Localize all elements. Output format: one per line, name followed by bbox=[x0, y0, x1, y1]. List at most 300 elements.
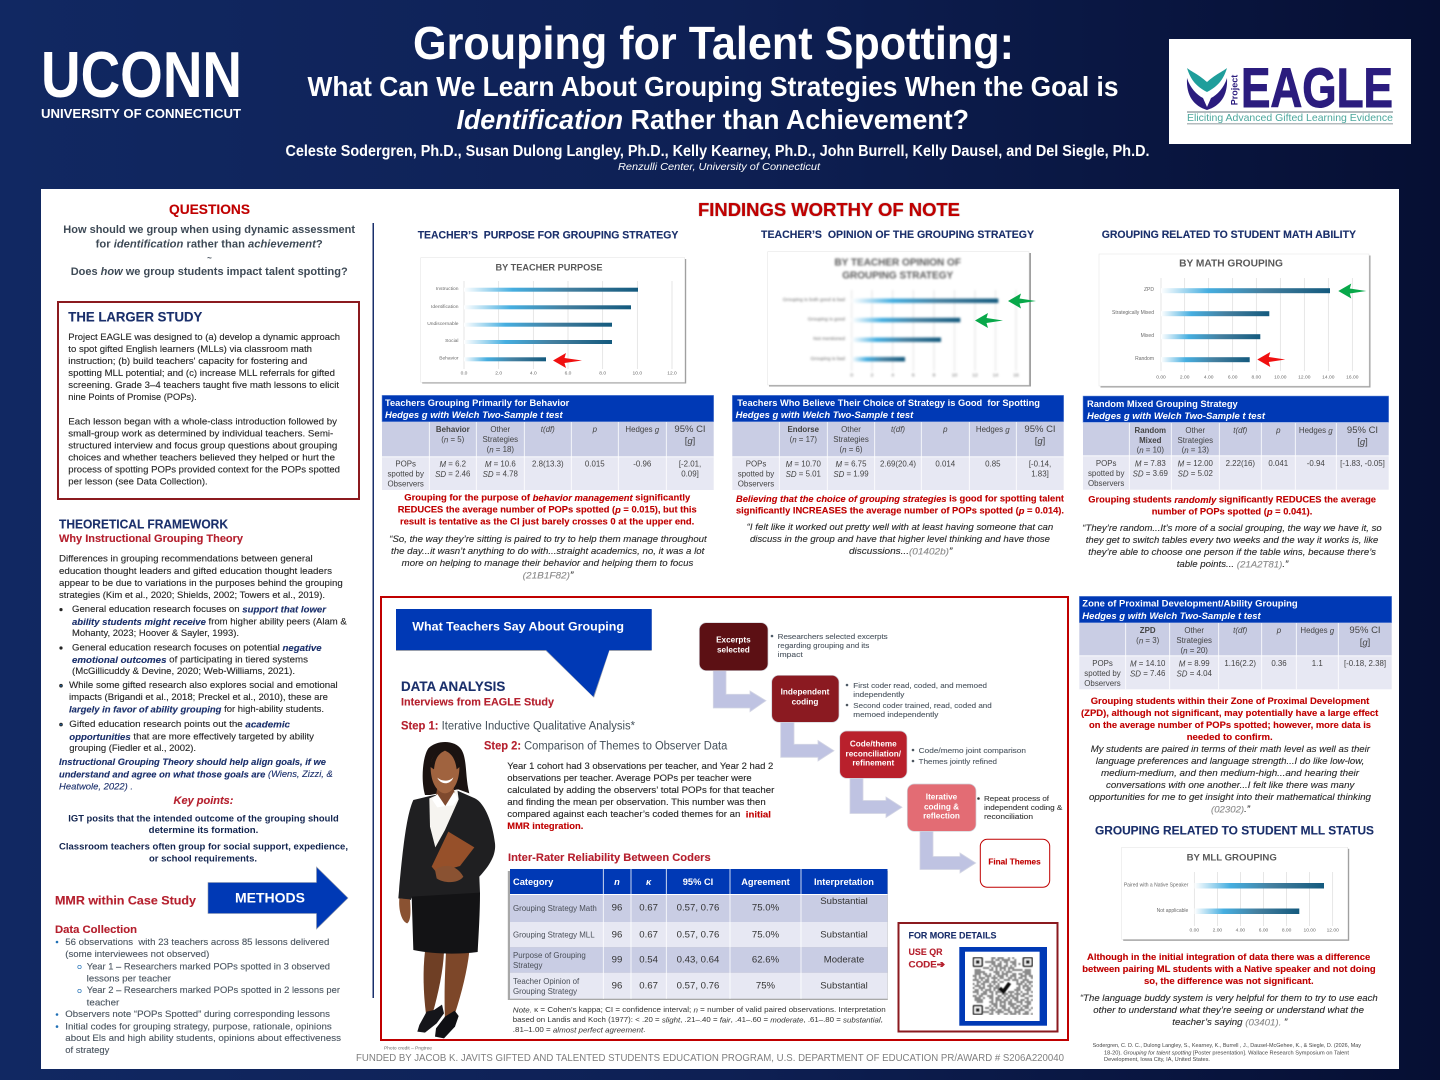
table: random mixed grouping: 95% CI bbox=[1347, 425, 1378, 436]
text block: theoretical framework body: Heatwole, 2022) . bbox=[59, 781, 133, 792]
logo: Project EAGLE: Project bbox=[1230, 75, 1240, 105]
table: zone of proximal development: Other bbox=[1184, 626, 1204, 635]
step: independent coding: coding bbox=[792, 698, 818, 706]
title: Identification Rather than Achievement? bbox=[456, 104, 969, 135]
logo: UConn: UNIVERSITY OF CONNECTICUT bbox=[41, 106, 241, 121]
text block: larger study body: process of spotting POPs provided context for the POPs spotted bbox=[68, 464, 340, 476]
chart: by teacher purpose: 0.0 bbox=[461, 370, 468, 376]
table: teachers grouping for behavior: spotted by bbox=[387, 470, 424, 478]
table: inter-rater reliability: 75% bbox=[756, 980, 776, 992]
quote: random: they get to switch tables every two weeks and the way it works is, like bbox=[1086, 535, 1378, 546]
quote: MLL: “The language buddy system is very helpful for them to try to use each bbox=[1080, 993, 1378, 1004]
table: zone of proximal development: POPs bbox=[1092, 659, 1113, 668]
chart: by teacher opinion: Not mentioned bbox=[813, 336, 845, 342]
table: inter-rater reliability: Substantial bbox=[820, 896, 868, 907]
step: excerpts selected bbox=[699, 623, 768, 671]
table: zone of proximal development: Observers bbox=[1084, 679, 1121, 688]
notes: reconciliation: Themes jointly refined bbox=[919, 757, 997, 766]
step: code/theme reconciliation: reconciliation/ bbox=[846, 750, 902, 758]
table: teachers who believe strategy is good: Observers bbox=[738, 480, 774, 488]
chart: by teacher purpose: Behavior bbox=[439, 356, 459, 362]
table note: based on Landis and Koch (1977): < .20 = slight, .21–.40 = fair, .41–.60 = moderate , .61–.80 = substantial , bbox=[513, 1015, 883, 1024]
table: teachers grouping for behavior: 0.015 bbox=[585, 460, 605, 468]
chart: by teacher purpose: Instruction bbox=[436, 286, 459, 292]
table: inter-rater reliability: 95% CI bbox=[683, 877, 713, 887]
table: teachers who believe strategy is good: 0.014 bbox=[935, 460, 956, 468]
table: random mixed grouping: Other bbox=[1185, 426, 1206, 435]
arrow: coding to reconciliation bbox=[781, 722, 834, 761]
text block: step 2 description: MMR integration. bbox=[507, 821, 583, 832]
table: inter-rater reliability: 0.57, 0.76 bbox=[677, 902, 719, 914]
table: teachers who believe strategy is good: [g] bbox=[1035, 436, 1045, 446]
text block: data collection: 56 observations with 23 teachers across 85 lessons delivered bbox=[65, 937, 329, 948]
table: random mixed grouping: (n = 13) bbox=[1182, 446, 1209, 454]
table: teachers grouping for behavior: SD = 4.78 bbox=[483, 470, 519, 478]
table: random mixed grouping: Mixed bbox=[1139, 436, 1162, 445]
table: teachers who believe strategy is good: (n = 17) bbox=[790, 435, 817, 444]
table: zone of proximal development: 0.36 bbox=[1271, 659, 1287, 668]
table: inter-rater reliability: 75.0% bbox=[752, 902, 780, 914]
step: excerpts selected: selected bbox=[717, 646, 750, 654]
chart: by math grouping: Strategically Mixed bbox=[1112, 310, 1154, 316]
arrow: excerpts to coding bbox=[713, 671, 766, 712]
table: zone of proximal development: ZPD bbox=[1140, 626, 1156, 635]
text block: data collection: lessons per teacher bbox=[87, 974, 172, 984]
table: zone of proximal development: Zone of Proximal Development/Ability Grouping bbox=[1082, 599, 1298, 609]
text block: theoretical framework body: grouping (Fiedler et al., 2002). bbox=[69, 743, 196, 754]
photo: teacher with folder bbox=[398, 742, 495, 1038]
arrow: red bbox=[553, 353, 582, 368]
text block: theoretical framework body: Differences in grouping recommendations between general bbox=[59, 554, 313, 564]
table: inter-rater reliability: Agreement bbox=[741, 877, 790, 887]
table: teachers grouping for behavior bbox=[382, 395, 714, 490]
citation: Development, Iowa City, IA, United States. bbox=[1104, 1057, 1210, 1063]
chart: by math grouping: 10.00 bbox=[1274, 374, 1287, 380]
quote: zone of proximal development: conversations with one another...I felt like there was many bbox=[1106, 780, 1356, 791]
table: random mixed grouping: spotted by bbox=[1088, 469, 1124, 478]
table: zone of proximal development: M = 14.10 bbox=[1130, 659, 1166, 668]
text block: larger study body: Each lesson began with a whole-class introduction followed by bbox=[68, 416, 337, 428]
notes: excerpts: regarding grouping and its bbox=[778, 641, 870, 650]
heading: math ability: GROUPING RELATED TO STUDENT MATH ABILITY bbox=[1102, 229, 1357, 241]
table: zone of proximal development: M = 8.99 bbox=[1179, 659, 1210, 668]
quote: zone of proximal development: (02302).” bbox=[1211, 804, 1251, 815]
table: inter-rater reliability: 99 bbox=[612, 954, 622, 966]
text block: larger study body: per lesson (see Data Collection). bbox=[68, 476, 208, 488]
table: random mixed grouping: SD = 5.02 bbox=[1178, 469, 1213, 478]
callout: what teachers say: What Teachers Say About Grouping bbox=[412, 620, 624, 634]
flow diagram: analysis process bbox=[699, 623, 1062, 887]
notes: iterative coding: Repeat process of bbox=[984, 794, 1050, 803]
table: teachers who believe strategy is good bbox=[732, 395, 1064, 490]
table: zone of proximal development: t(df) bbox=[1233, 626, 1248, 635]
table: inter-rater reliability: n bbox=[614, 877, 620, 887]
heading: data analysis: Interviews from EAGLE Study bbox=[401, 696, 555, 708]
quote: random: “They’re random...It’s more of a social grouping, the way we have it, so bbox=[1082, 523, 1382, 534]
arrow: green second bbox=[975, 313, 1003, 328]
table: zone of proximal development: Hedges g bbox=[1300, 626, 1335, 635]
table: inter-rater reliability: Purpose of Grouping bbox=[513, 951, 586, 960]
finding: random grouping: Grouping students randomly significantly REDUCES the average bbox=[1088, 494, 1376, 506]
arrow: green ZPD bbox=[1338, 284, 1366, 298]
text block: data collection: Year 1 – Researchers marked POPs spotted in 3 observed bbox=[87, 961, 330, 972]
table: inter-rater reliability: 96 bbox=[612, 930, 622, 940]
table: teachers who believe strategy is good: Teachers Who Believe Their Choice of Strategy is Good for Spotting bbox=[737, 398, 1040, 408]
notes: independent coding: First coder read, coded, and memoed bbox=[853, 681, 987, 690]
chart: by teacher purpose: 4.0 bbox=[530, 370, 537, 376]
table: inter-rater reliability: 0.54 bbox=[639, 954, 659, 966]
text block: theoretical framework body: General education research focuses on support that lower bbox=[72, 604, 327, 615]
table: teachers who believe strategy is good: 0.85 bbox=[985, 460, 1001, 468]
table: teachers who believe strategy is good: Other bbox=[841, 425, 861, 434]
table: teachers who believe strategy is good: SD = 5.01 bbox=[786, 470, 821, 478]
table: random mixed grouping: POPs bbox=[1096, 459, 1117, 468]
table: inter-rater reliability: 62.6% bbox=[752, 954, 780, 966]
quote: zone of proximal development: opportunities for me to get insight into their mathematical thinking bbox=[1089, 792, 1372, 803]
table note: Note. κ = Cohen’s kappa; CI = confidence interval; n = number of valid paired observations. Interpretation bbox=[513, 1005, 886, 1014]
step: excerpts selected: Excerpts bbox=[716, 636, 751, 644]
chart: by teacher opinion: 0 bbox=[850, 372, 853, 378]
table: zone of proximal development: p bbox=[1276, 626, 1282, 635]
table: random mixed grouping: -0.94 bbox=[1307, 459, 1325, 468]
text block: theoretical framework body: impacts (Brigandi et al., 2018; Preckel et al., 2010), these are bbox=[69, 692, 328, 703]
text block: theoretical framework body: understand and agree on what those goals are (Wiens, Zizzi, & bbox=[59, 769, 333, 780]
text block: research questions: How should we group when using dynamic assessment bbox=[63, 224, 355, 236]
text block: research questions: ~ bbox=[207, 254, 212, 262]
finding: behavior management: Grouping for the purpose of behavior management significantly bbox=[404, 492, 691, 504]
quote: MLL bbox=[1080, 993, 1378, 1028]
table: random mixed grouping: p bbox=[1275, 426, 1281, 435]
text block: step 2 description: Year 1 cohort had 3 observations per teacher, and Year 2 had 2 bbox=[507, 761, 773, 772]
heading: theoretical framework: THEORETICAL FRAMEWORK bbox=[59, 518, 228, 532]
step: iterative coding bbox=[907, 784, 976, 831]
chart: by teacher opinion: 4 bbox=[891, 372, 894, 378]
finding: zone of proximal development: needed to confirm. bbox=[1187, 732, 1273, 743]
chart: by math grouping: Mixed bbox=[1141, 333, 1154, 339]
finding: MLL bbox=[1082, 952, 1376, 987]
text block: research questions: for identification rather than achievement? bbox=[96, 238, 323, 250]
table: teachers who believe strategy is good: 2.69(20.4) bbox=[880, 460, 916, 468]
citation bbox=[1093, 1043, 1361, 1063]
panel: for more details bbox=[898, 923, 1058, 1032]
table: teachers grouping for behavior: p bbox=[592, 425, 598, 434]
table: inter-rater reliability: 96 bbox=[612, 902, 622, 914]
table note bbox=[513, 1005, 886, 1034]
citation: Sodergren, C. D. C., Dulong Langley, S., Kearney, K., Burrell , J., Dausel-McGehee, K., & Siegle, D. (2026, May bbox=[1093, 1043, 1361, 1049]
table: inter-rater reliability: κ bbox=[646, 877, 652, 887]
arrow: methods bbox=[208, 867, 348, 929]
heading: inter-rater reliability: Inter-Rater Reliability Between Coders bbox=[508, 852, 711, 864]
citation: 18-20). Grouping for talent spotting [Poster presentation]. Wallace Research Symposium on Talent bbox=[1104, 1050, 1350, 1056]
quote: behavior: more on helping to manage their behavior and helping them to focus bbox=[402, 558, 693, 569]
table: teachers who believe strategy is good: t(df) bbox=[891, 425, 905, 434]
text block: larger study body: small-group work as determined by individual teachers. Semi- bbox=[68, 428, 333, 440]
chart: by teacher opinion: 6 bbox=[912, 372, 915, 378]
key points: determine its formation. bbox=[149, 825, 258, 836]
quote: behavior bbox=[389, 534, 707, 581]
table: inter-rater reliability: 96 bbox=[612, 980, 622, 992]
quote: good for spotting: discussions...(01402b)” bbox=[849, 546, 953, 557]
finding: believing choice of strategy bbox=[736, 494, 1065, 516]
finding: random grouping: number of POPs spotted (p = 0.041). bbox=[1152, 506, 1312, 518]
text block: data collection: Observers note “POPs Spotted” during corresponding lessons bbox=[65, 1009, 330, 1020]
chart: by math grouping: 2.00 bbox=[1180, 374, 1190, 380]
quote: zone of proximal development: language preferences and language strength...I do like low-low, bbox=[1096, 756, 1364, 767]
table: teachers grouping for behavior: 0.09] bbox=[681, 470, 699, 478]
text block: data collection: teacher bbox=[87, 997, 120, 1008]
table: teachers grouping for behavior: [g] bbox=[685, 436, 695, 446]
text block: step 2 description: observations per teacher. Average POPs per teacher were bbox=[507, 773, 752, 784]
key points: Key points: bbox=[174, 795, 234, 807]
table: teachers grouping for behavior: M = 6.2 bbox=[440, 460, 466, 468]
text block: step 2 description: compared against each teacher’s coded themes for an initial bbox=[507, 809, 771, 820]
quote: MLL: teacher’s saying (03401). ” bbox=[1172, 1017, 1288, 1028]
text block: larger study body: instruction; (b) build teachers' capacity for fostering and bbox=[68, 356, 307, 367]
chart: by teacher purpose: Identification bbox=[431, 304, 459, 310]
table: inter-rater reliability: 0.57, 0.76 bbox=[677, 930, 719, 940]
chart: by MLL grouping: 8.00 bbox=[1282, 928, 1292, 934]
table: teachers who believe strategy is good: Strategies bbox=[833, 435, 869, 444]
notes: independent coding: Second coder trained, read, coded and bbox=[853, 701, 992, 710]
text block: data collection bbox=[56, 937, 341, 1056]
table: zone of proximal development: (n = 3) bbox=[1136, 636, 1160, 645]
chart: by teacher purpose: 10.0 bbox=[633, 370, 642, 376]
table: random mixed grouping: Random Mixed Grouping Strategy bbox=[1087, 399, 1239, 409]
text block: larger study body bbox=[68, 332, 340, 488]
key points: Classroom teachers often group for social support, expedience, bbox=[59, 841, 348, 852]
table: random mixed grouping: Hedges g bbox=[1299, 426, 1333, 435]
QR code bbox=[959, 947, 1047, 1026]
finding: behavior management: REDUCES the average number of POPs spotted (p = 0.015), but this bbox=[398, 504, 697, 516]
step: final themes: Final Themes bbox=[988, 858, 1041, 866]
chart: by teacher opinion: 10 bbox=[952, 372, 957, 378]
table: teachers who believe strategy is good: Hedges g with Welch Two-Sample t test bbox=[736, 410, 914, 420]
quote: zone of proximal development: medium-medium, and then medium-high...and hearing their bbox=[1101, 768, 1360, 779]
table: inter-rater reliability: 75.0% bbox=[752, 930, 780, 940]
quote: behavior: the day...it wasn’t anything to do with...straight academics, no, it was a lot bbox=[391, 546, 705, 557]
chart: by teacher purpose: 6.0 bbox=[565, 370, 572, 376]
text block: data collection: (some interviewees not observed) bbox=[65, 949, 209, 960]
chart: by MLL grouping: Paired with a Native Speaker bbox=[1124, 882, 1189, 888]
table: zone of proximal development bbox=[1079, 596, 1392, 689]
chart: by teacher opinion: 12 bbox=[972, 372, 978, 378]
step: final themes bbox=[980, 839, 1050, 887]
text block: theoretical framework body: Mohanty, 2023; Hoover & Sayler, 1993). bbox=[72, 628, 239, 639]
text block: larger study body: screening. Grade 3–4 teachers taught five math lessons to elicit bbox=[68, 380, 339, 391]
text block: larger study body: structured interview and focus group questions about grouping bbox=[68, 440, 337, 452]
chart: by teacher opinion: 16 bbox=[1013, 372, 1019, 378]
table: zone of proximal development: (n = 20) bbox=[1180, 646, 1208, 655]
notes: excerpts: Researchers selected excerpts bbox=[778, 632, 888, 641]
callout: what teachers say bbox=[396, 609, 652, 698]
text: use QR code: USE QR bbox=[908, 947, 943, 958]
table: teachers who believe strategy is good: SD = 1.99 bbox=[833, 470, 869, 478]
text block: theoretical framework body: emotional outcomes of participating in tiered systems bbox=[72, 654, 308, 666]
notes: independent coding: independently bbox=[853, 690, 905, 699]
notes: independent coding: memoed independently bbox=[853, 710, 939, 719]
step: independent coding: Independent bbox=[781, 688, 830, 696]
authors and affiliation: Celeste Sodergren, Ph.D., Susan Dulong Langley, Ph.D., Kelly Kearney, Ph.D., John Burrell, Kelly Dausel, and Del Siegle, Ph.D. bbox=[286, 143, 1150, 160]
chart: by teacher purpose: Undiscernable bbox=[427, 321, 459, 327]
table: teachers who believe strategy is good: 95% CI bbox=[1024, 424, 1056, 435]
chart: by teacher opinion: Grouping is good bbox=[808, 316, 845, 322]
table: teachers grouping for behavior: -0.96 bbox=[633, 460, 652, 468]
chart: by math grouping: 4.00 bbox=[1204, 374, 1214, 380]
table: teachers who believe strategy is good: spotted by bbox=[738, 470, 774, 478]
table: teachers who believe strategy is good: [-0.14, bbox=[1029, 460, 1051, 468]
finding: zone of proximal development: Grouping students within their Zone of Proximal Development bbox=[1091, 696, 1370, 707]
table: teachers who believe strategy is good: POPs bbox=[746, 460, 766, 468]
text block: theoretical framework body: opportunities that are more effectively targeted by ability bbox=[69, 731, 314, 742]
chart: by math grouping: Random bbox=[1135, 356, 1154, 362]
key points bbox=[59, 795, 348, 864]
text block: data collection: of strategy bbox=[65, 1045, 109, 1056]
text block: larger study body: Project EAGLE was designed to (a) develop a dynamic approach bbox=[68, 332, 340, 343]
chart: by MLL grouping: BY MLL GROUPING bbox=[1187, 852, 1277, 864]
table: inter-rater reliability: Moderate bbox=[824, 954, 864, 966]
heading: data analysis: DATA ANALYSIS bbox=[401, 678, 505, 694]
authors and affiliation: Renzulli Center, University of Connecticut bbox=[618, 161, 821, 173]
quote: behavior: “So, the way they’re sitting is paired to try to help them manage throughout bbox=[389, 534, 707, 545]
key points: IGT posits that the intended outcome of the grouping should bbox=[68, 814, 339, 824]
chart: by teacher opinion: BY TEACHER OPINION OF bbox=[834, 258, 961, 268]
table: teachers grouping for behavior: 2.8(13.3) bbox=[532, 460, 564, 468]
chart: by MLL grouping: 4.00 bbox=[1236, 928, 1245, 934]
table: random mixed grouping: M = 12.00 bbox=[1178, 459, 1214, 468]
finding: zone of proximal development bbox=[1081, 696, 1379, 743]
text block: larger study body: spotting MLL potential; and (c) increase MLL referrals for gifted bbox=[68, 368, 335, 379]
finding: random grouping bbox=[1088, 494, 1376, 518]
table: inter-rater reliability: Substantial bbox=[820, 980, 868, 992]
arrow: green top bbox=[1008, 294, 1036, 308]
table: teachers grouping for behavior: Strategies bbox=[483, 435, 518, 444]
text block: step 2 description: and finding the mean per observation. This number was then bbox=[507, 797, 766, 808]
arrow: methods: METHODS bbox=[235, 890, 305, 906]
step: code/theme reconciliation: Code/theme bbox=[850, 740, 897, 748]
heading: data analysis bbox=[401, 678, 555, 708]
table: inter-rater reliability: Grouping Strategy bbox=[513, 987, 577, 996]
heading: theoretical framework: Why Instructional Grouping Theory bbox=[59, 533, 244, 545]
quote: behavior: (21B1F82)” bbox=[523, 570, 574, 581]
chart: by math grouping: 14.00 bbox=[1322, 374, 1335, 380]
white content panel bbox=[41, 189, 1399, 1069]
text block: theoretical framework body bbox=[59, 554, 347, 792]
notes: excerpts: impact bbox=[778, 650, 803, 659]
text block: larger study body: nine Points of Promise (POPs). bbox=[68, 392, 197, 403]
table: random mixed grouping: t(df) bbox=[1233, 426, 1248, 435]
table: random mixed grouping: Hedges g with Welch Two-Sample t test bbox=[1087, 411, 1266, 421]
table: inter-rater reliability: Interpretation bbox=[814, 877, 874, 887]
table: inter-rater reliability: Category bbox=[513, 877, 554, 887]
text block: theoretical framework body: ability students might receive from higher ability peers (Alam & bbox=[72, 616, 347, 627]
step 2: Step 2: Comparison of Themes to Observer Data bbox=[484, 740, 728, 752]
text block: data collection: Year 2 – Researchers marked POPs spotted in 2 lessons per bbox=[87, 985, 341, 996]
table: teachers grouping for behavior: Behavior bbox=[436, 425, 470, 434]
heading: data collection: Data Collection bbox=[55, 924, 137, 936]
divider bbox=[372, 223, 374, 998]
table: inter-rater reliability: 0.67 bbox=[639, 930, 658, 940]
table: inter-rater reliability: 0.43, 0.64 bbox=[677, 954, 720, 966]
table: random mixed grouping: Random bbox=[1135, 426, 1166, 435]
photo credit: Photo credit – Pngtree bbox=[384, 1046, 432, 1050]
table: zone of proximal development: SD = 7.46 bbox=[1130, 669, 1166, 678]
table: teachers grouping for behavior: (n = 5) bbox=[441, 435, 465, 444]
authors and affiliation bbox=[286, 143, 1150, 173]
notes: reconciliation bbox=[912, 746, 1026, 766]
table: zone of proximal development: [g] bbox=[1360, 637, 1370, 648]
panel: the larger study bbox=[58, 302, 359, 499]
table: random mixed grouping: SD = 3.69 bbox=[1133, 469, 1169, 478]
chart: by teacher opinion bbox=[768, 252, 1036, 386]
chart: by teacher purpose: 2.0 bbox=[495, 370, 502, 376]
table: teachers grouping for behavior: Teachers Grouping Primarily for Behavior bbox=[385, 398, 570, 408]
heading: teacher's opinion: TEACHER’S OPINION OF THE GROUPING STRATEGY bbox=[761, 229, 1035, 241]
text block: step 2 description: calculated by adding the observers’ total POPs for that teacher bbox=[507, 785, 775, 796]
text block: data collection: about Els and high ability students, opinions about effectiveness bbox=[65, 1033, 341, 1044]
table: teachers who believe strategy is good: Hedges g bbox=[976, 425, 1010, 434]
text block: theoretical framework body: appear to be due to variations in the purposes behind the grouping bbox=[59, 578, 343, 589]
chart: by MLL grouping: 2.00 bbox=[1213, 928, 1222, 934]
chart: by teacher purpose: Social bbox=[445, 338, 458, 344]
table: zone of proximal development: 1.1 bbox=[1312, 659, 1323, 668]
text block: data collection: Initial codes for grouping strategy, purpose, rationale, opinions bbox=[65, 1021, 332, 1032]
quote: random bbox=[1082, 523, 1382, 570]
table: teachers grouping for behavior: 95% CI bbox=[674, 424, 706, 435]
text block: theoretical framework body: General education research focuses on potential negative bbox=[72, 642, 322, 654]
table: random mixed grouping bbox=[1083, 396, 1389, 490]
table: teachers who believe strategy is good: Endorse bbox=[788, 425, 820, 434]
step: independent coding bbox=[772, 675, 839, 722]
table: zone of proximal development: 95% CI bbox=[1349, 625, 1381, 636]
table: random mixed grouping: [g] bbox=[1357, 436, 1368, 448]
logo: Project EAGLE: Eliciting Advanced Gifted Learning Evidence bbox=[1187, 112, 1393, 124]
step: code/theme reconciliation: refinement bbox=[852, 758, 895, 768]
quote: random: table points... (21A2T81).” bbox=[1177, 559, 1289, 570]
arrow: red random bbox=[1257, 352, 1285, 367]
text block: theoretical framework body: While some gifted research also explores social and emotional bbox=[69, 680, 338, 691]
chart: by math grouping: 12.00 bbox=[1298, 374, 1311, 380]
heading: questions: QUESTIONS bbox=[169, 201, 250, 217]
quote: good for spotting: discuss in the group and have that higher level thinking and have those bbox=[750, 534, 1050, 545]
table: random mixed grouping: [-1.83, -0.05] bbox=[1340, 459, 1385, 468]
table: teachers who believe strategy is good: (n = 6) bbox=[839, 445, 863, 454]
heading: MLL status: GROUPING RELATED TO STUDENT MLL STATUS bbox=[1095, 824, 1374, 838]
chart: by teacher opinion: 8 bbox=[933, 372, 936, 378]
table: inter-rater reliability: 0.67 bbox=[639, 980, 658, 992]
quote: zone of proximal development bbox=[1089, 744, 1372, 815]
table: teachers grouping for behavior: (n = 18) bbox=[487, 445, 514, 454]
step: iterative coding: coding & bbox=[924, 802, 959, 812]
text block: research questions bbox=[63, 224, 355, 278]
finding: MLL: so, the difference was not significant. bbox=[1144, 976, 1314, 987]
arrow: reflection to final themes bbox=[920, 831, 976, 873]
chart: by teacher purpose: BY TEACHER PURPOSE bbox=[495, 262, 603, 272]
notes: reconciliation: Code/memo joint comparison bbox=[919, 746, 1026, 755]
text block: theoretical framework body: Gifted education research points out the academic bbox=[69, 719, 291, 730]
logo: Project EAGLE bbox=[1169, 39, 1411, 144]
text block: theoretical framework body: (McGillicuddy & Devine, 2020; Web-Williams, 2021). bbox=[72, 666, 295, 677]
text block: theoretical framework body: strategies (Kim et al., 2020; Shields, 2002; Towers et al., 2019). bbox=[59, 590, 325, 601]
text: use QR code bbox=[908, 947, 946, 970]
table: teachers grouping for behavior: SD = 2.46 bbox=[435, 470, 471, 478]
finding: behavior management: result is tentative as the CI just barely crosses 0 at the upper end. bbox=[400, 516, 694, 528]
quote: good for spotting: “I felt like it worked out pretty well with at least having someone that can bbox=[747, 522, 1053, 533]
panel: what teachers say about grouping bbox=[381, 597, 1068, 1050]
chart: by math grouping bbox=[1099, 254, 1370, 388]
notes: excerpts bbox=[771, 632, 888, 659]
chart: by MLL grouping: 10.00 bbox=[1303, 928, 1316, 934]
chart: by teacher opinion: 2 bbox=[871, 372, 874, 378]
